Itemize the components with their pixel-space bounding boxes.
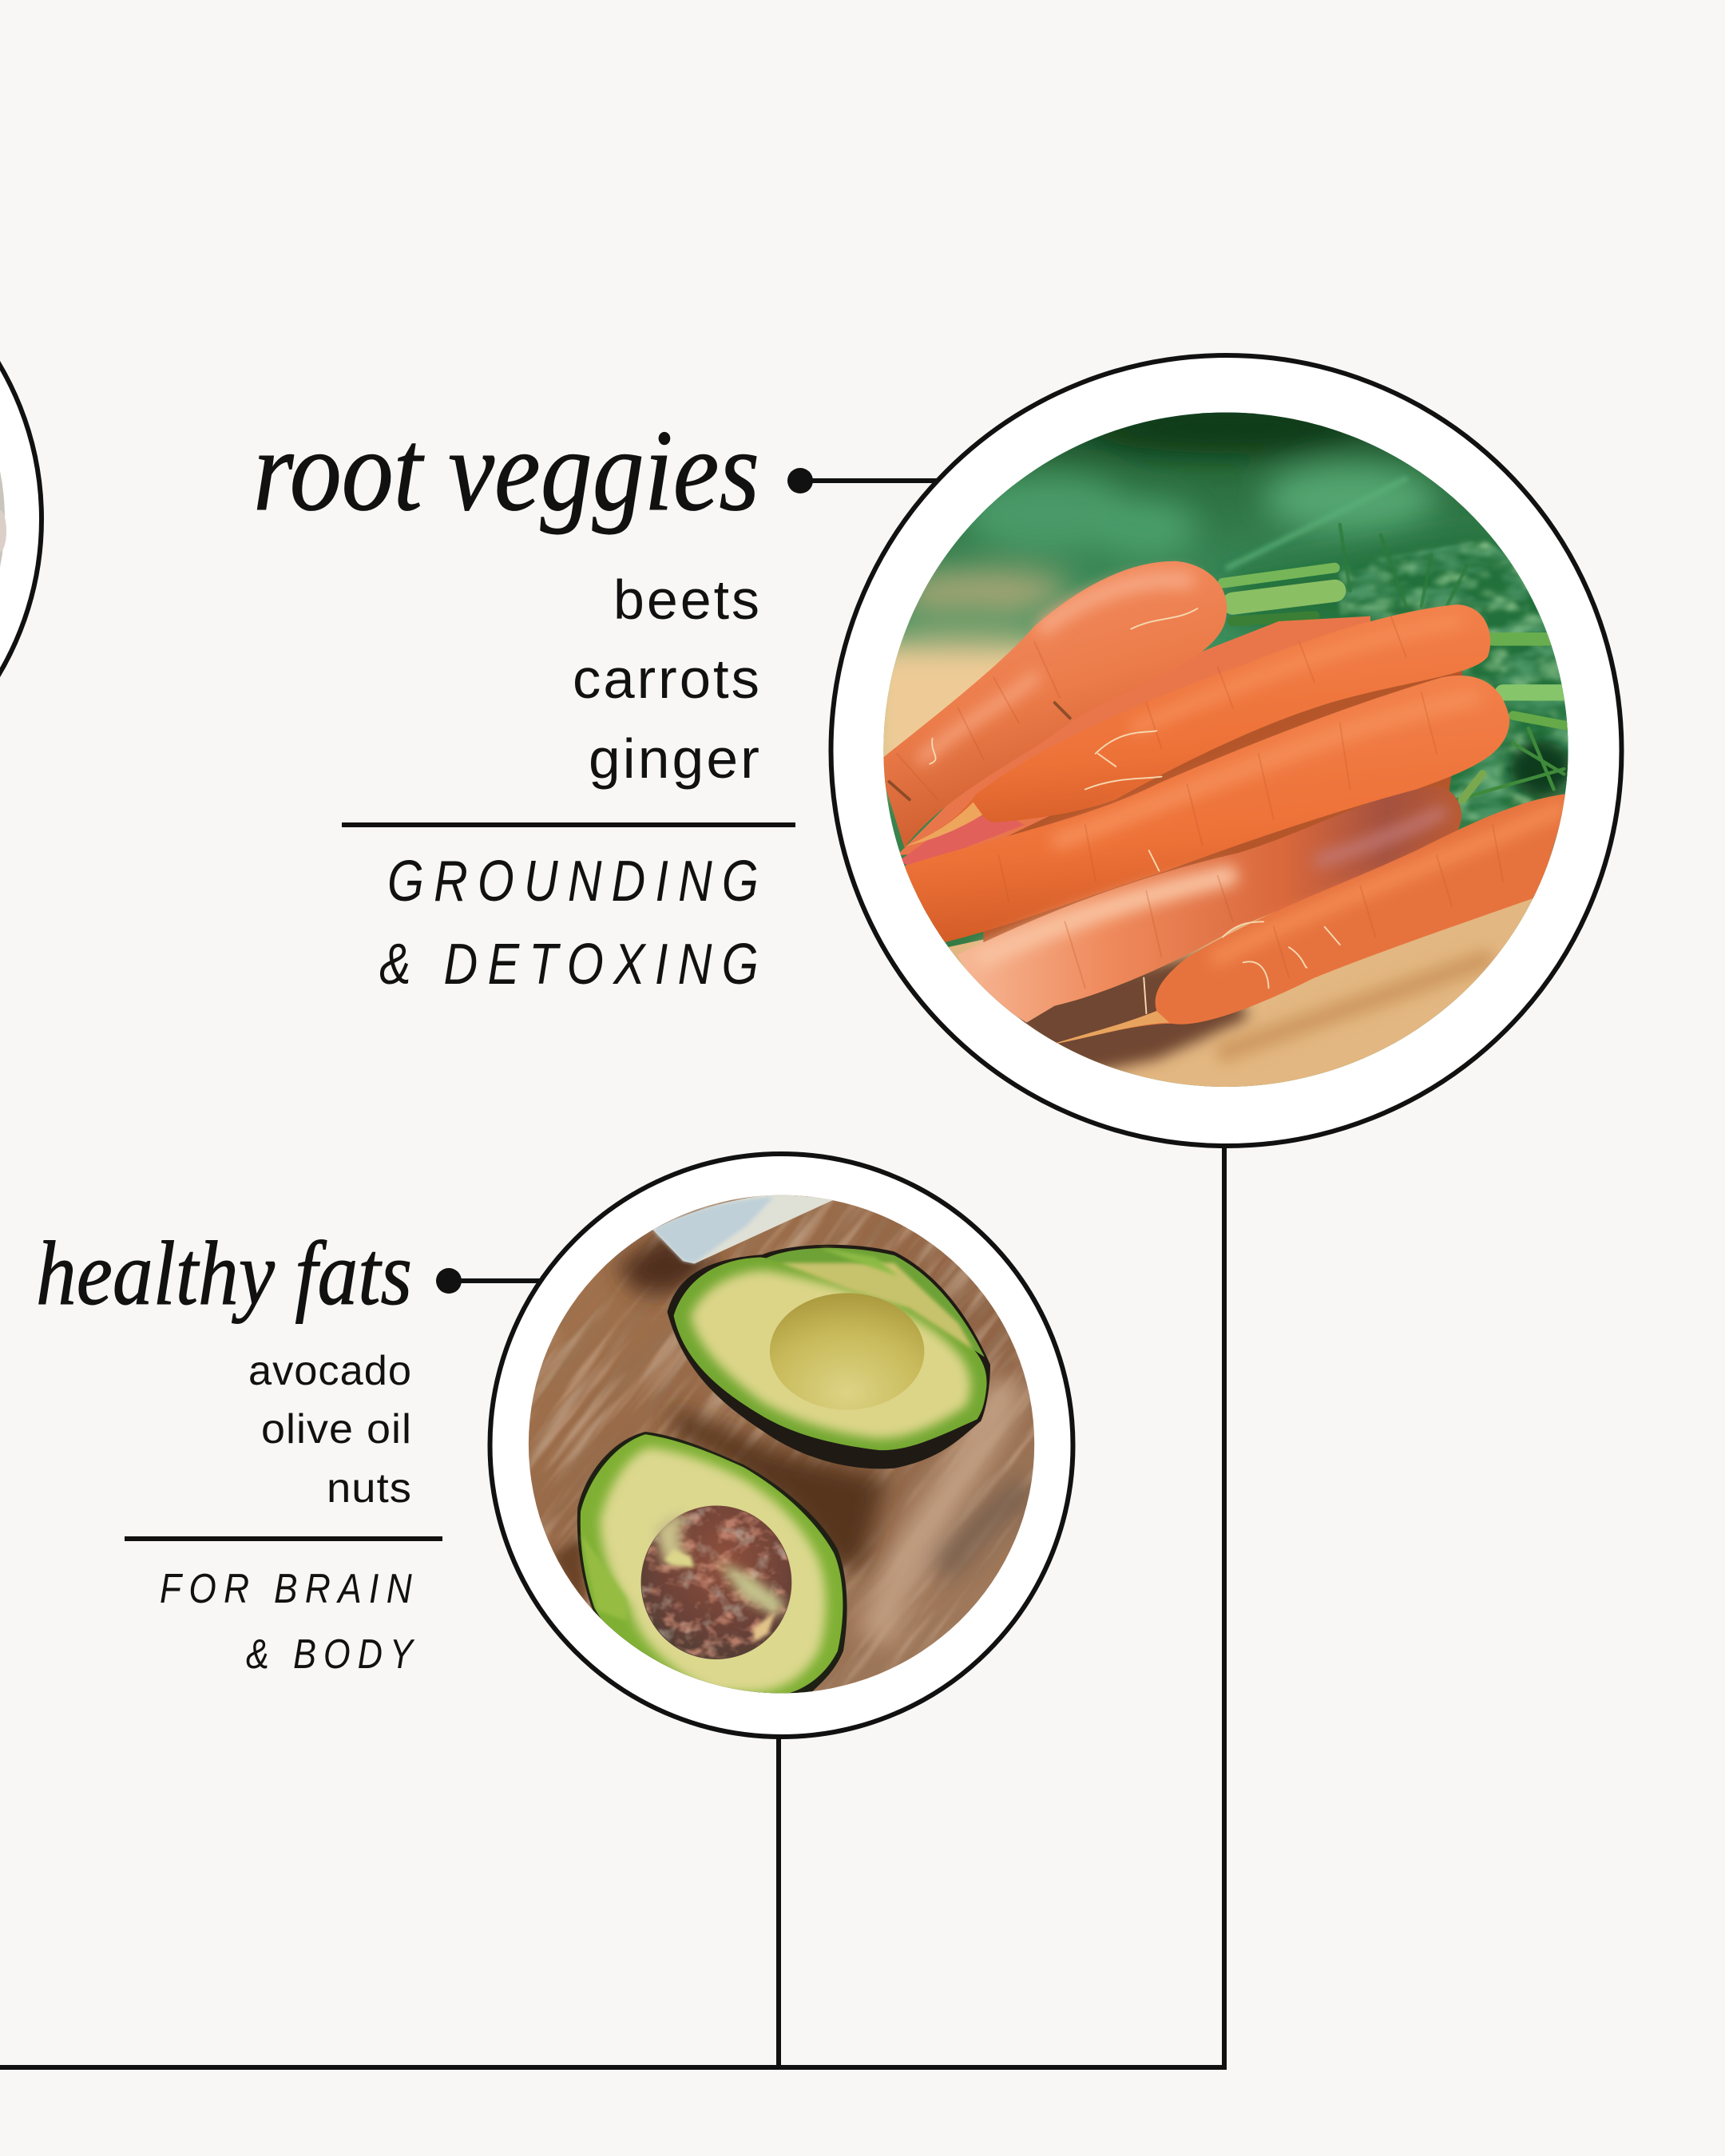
divider rule [342,822,795,827]
heading: healthy fats: healthy fats [36,1223,412,1324]
benefit text: for brain and body: FOR BRAIN [160,1566,419,1612]
carrot 2 [904,604,1490,846]
panel: root veggies [253,355,1621,1146]
carrot 3 [902,676,1509,942]
partial circle: cropped neighbour panel at left edge [0,215,42,823]
food list: healthy fats [248,1348,412,1512]
napkin [653,1195,836,1264]
photo: avocado [263,914,1321,1972]
divider rule [125,1536,442,1541]
carrot tops [1223,478,1574,820]
food list: root veggies [573,569,762,790]
bottom avocado half [577,1432,847,1696]
top avocado half [668,1245,990,1468]
orange layer behind front carrots [897,616,1370,855]
food list: root veggies: carrots [573,648,762,710]
circle frame: avocado [490,1154,1073,1737]
connector lines to bottom bus [0,1142,1224,2067]
carrot 4 [958,787,1461,1023]
food list: healthy fats: olive oil [261,1406,412,1453]
benefit text: for brain and body [160,1566,420,1678]
food list: root veggies: ginger [589,727,762,790]
benefit text: grounding and detoxing [379,850,768,997]
infographic canvas [0,353,1624,2070]
benefit text: for brain and body: & BODY [246,1631,420,1678]
carrot 1 [882,561,1227,848]
connector with dot: healthy fats [436,1268,545,1294]
heading: root veggies: root veggies [253,406,759,535]
circle frame: carrots [831,355,1621,1146]
panel: healthy fats [36,914,1321,1972]
pit texture [641,1506,791,1659]
photo: carrots [861,402,1584,1095]
shaded orange between carrots [983,652,1462,953]
connector with dot: root veggies [787,468,944,493]
wood surface [949,855,1551,1087]
food list: healthy fats: nuts [327,1465,412,1512]
benefit text: grounding and detoxing: & DETOXING [379,933,768,997]
carrot highlights [922,580,1559,957]
food list: healthy fats: avocado [248,1348,412,1394]
food list: root veggies: beets [613,569,762,631]
ridges and root hairs [889,608,1503,1013]
benefit text: grounding and detoxing: GROUNDING [387,850,768,914]
carrot 5 [1049,794,1569,1045]
wood grain [263,914,1321,1972]
